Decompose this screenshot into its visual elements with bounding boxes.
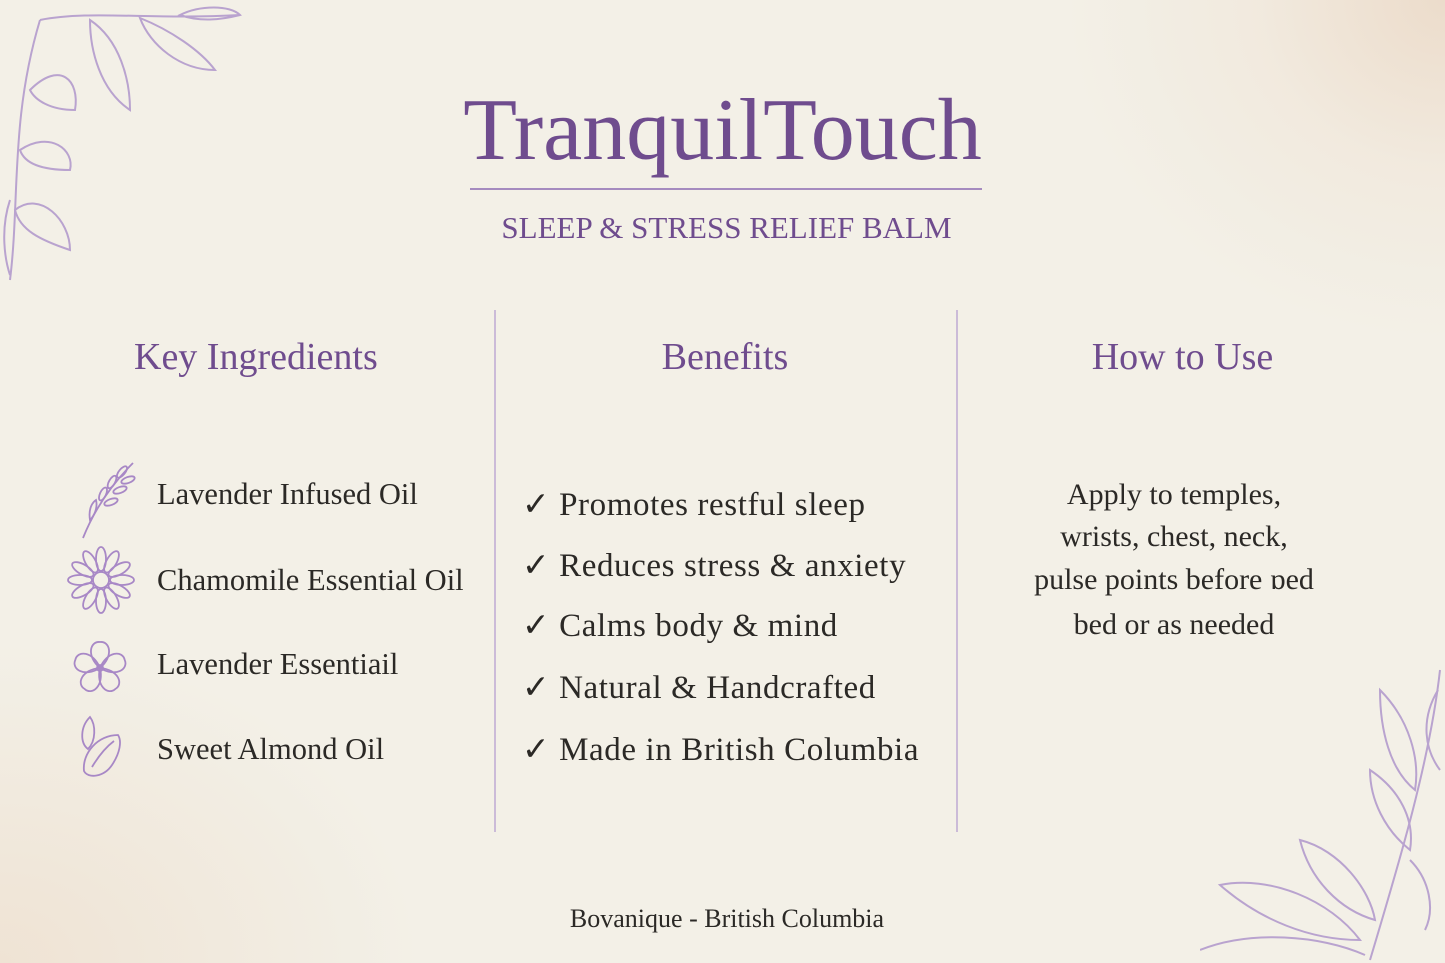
text: lavender essentiail: Lavender Essentiail [157,647,398,681]
panel: how to use: wrists, chest, neck, [1060,520,1288,553]
panel: benefits: ✓ Reduces stress & anxiety [522,548,906,584]
panel: benefits: ✓ Promotes restful sleep [522,487,866,523]
list: benefits [522,487,919,768]
title: TranquilTouch [463,82,982,179]
text: lavender infused oil: Lavender Infused Oil [157,477,418,511]
panel: how to use: Apply to temples, [1067,478,1281,511]
panel: benefits: ✓ Calms body & mind [522,608,838,644]
footer: Bovanique - British Columbia [570,904,884,933]
subtitle: SLEEP & STRESS RELIEF BALM [501,210,952,245]
text: sweet almond oil: Sweet Almond Oil [157,732,384,766]
panel: benefits: ✓ Made in British Columbia [522,732,919,768]
icon: chamomile [67,546,135,614]
decoration: bottom-right leaves [1200,670,1441,960]
panel: how to use [1034,336,1314,641]
icon: almond [81,716,121,777]
icon: flower [74,641,126,692]
heading: key ingredients: Key Ingredients [134,336,378,378]
divider right [956,310,958,832]
text: chamomile essential oil: Chamomile Essential Oil [157,563,464,597]
heading: benefits: Benefits [662,336,788,378]
text: instructions [1034,478,1314,641]
panel: how to use: bed or as needed [1074,608,1274,641]
decoration: top-left leaves [3,6,242,280]
heading: how to use: How to Use [1092,336,1273,378]
panel: benefits: ✓ Natural & Handcrafted [522,670,876,706]
divider left [494,310,496,832]
panel: benefits [522,336,919,768]
panel: how to use: pulse points before ɒed [1034,563,1314,596]
icon: lavender sprig [82,462,136,538]
panel: key ingredients [67,336,464,777]
title underline [470,188,982,190]
